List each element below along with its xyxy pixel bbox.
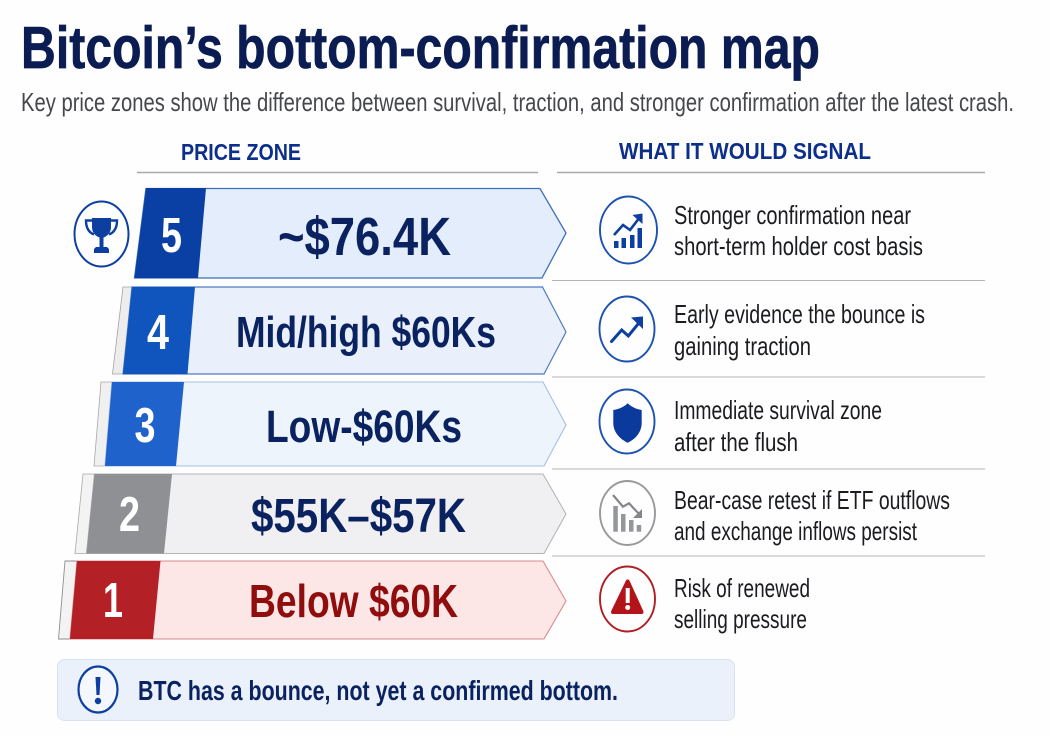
text: signal for zone 2 [674, 485, 950, 546]
panel: zone 2: 2 [119, 488, 140, 542]
panel: zone 2 [75, 474, 566, 554]
text: signal for zone 2: Bear-case retest if ETF outflows [674, 485, 950, 515]
panel: zone 5: ~$76.4K [278, 207, 451, 267]
panel: zone 1 [58, 561, 566, 639]
text: signal for zone 2: and exchange inflows persist [674, 516, 918, 546]
text: signal for zone 3: Immediate survival zone [674, 395, 882, 425]
text: signal for zone 3: after the flush [674, 427, 798, 457]
panel: zone 4: Mid/high $60Ks [236, 308, 496, 357]
panel: zone 3: 3 [134, 399, 156, 453]
text: signal for zone 1: selling pressure [674, 604, 807, 634]
text: signal for zone 5: short-term holder cost basis [674, 231, 923, 261]
icon: rising chart with bars [600, 196, 657, 264]
title: Bitcoin’s bottom-confirmation map [21, 15, 820, 81]
icon: falling chart [600, 481, 655, 545]
text: signal for zone 4: Early evidence the bounce is [674, 299, 925, 329]
panel: zone 5: 5 [161, 209, 182, 263]
column heading: what it would signal: WHAT IT WOULD SIGNAL [619, 138, 871, 164]
text: signal for zone 4: gaining traction [674, 331, 811, 361]
callout text: BTC has a bounce, not yet a confirmed bottom. [138, 675, 618, 706]
panel: zone 3: Low-$60Ks [266, 401, 462, 452]
callout [58, 660, 734, 720]
text: signal for zone 5: Stronger confirmation near [674, 200, 911, 230]
panel: zone 3 [94, 382, 566, 466]
icon: exclamation [78, 666, 118, 712]
icon: trophy [74, 202, 128, 266]
icon: trending up arrow [600, 296, 654, 362]
panel: zone 4: 4 [147, 306, 169, 360]
panel: zone 4 [112, 287, 566, 374]
text: signal for zone 1: Risk of renewed [674, 573, 810, 603]
text: signal for zone 3 [674, 395, 882, 457]
panel: zone 1: Below $60K [249, 575, 458, 627]
icon: shield [600, 390, 654, 454]
panel: zone 5 [134, 188, 566, 278]
text: signal for zone 5 [674, 200, 923, 261]
column heading: price zone: PRICE ZONE [181, 139, 301, 165]
panel: zone 2: $55K–$57K [251, 490, 466, 543]
text: signal for zone 1 [674, 573, 810, 634]
panel: zone 1: 1 [103, 574, 123, 628]
icon: warning triangle [600, 566, 655, 632]
text: signal for zone 4 [674, 299, 925, 361]
